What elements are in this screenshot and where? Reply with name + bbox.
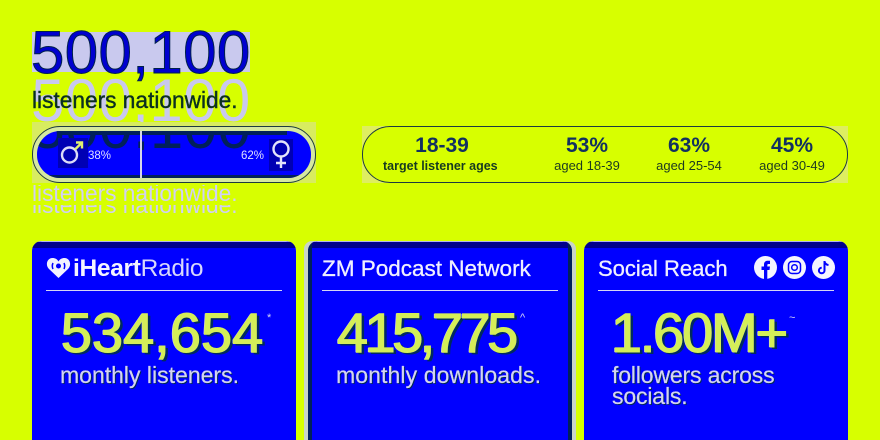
stat: 18-39: 18-39 xyxy=(415,134,469,157)
ghost text: lavender headline echoes xyxy=(31,67,251,213)
figure: 1.60M+: 1.60M+ xyxy=(611,301,786,364)
ghost text: lavender headline echoes: 500,100 xyxy=(31,67,251,134)
footnote mark: ~ xyxy=(789,312,795,324)
panel: ZM Podcast Network xyxy=(308,241,572,440)
panel: target ages xyxy=(362,126,848,183)
label: 38%: 38% xyxy=(88,150,111,162)
stat: 53%: aged 18-39 xyxy=(554,158,620,173)
stat: 63%: 63% xyxy=(668,134,710,157)
icon: male symbol xyxy=(58,138,88,168)
panel: gender split xyxy=(32,122,316,183)
logo: iHeartRadio: iHeartRadio xyxy=(73,255,203,282)
ghost text: lavender headline echoes: listeners nationwide. xyxy=(32,180,238,206)
stat: 45%: aged 30-49 xyxy=(759,158,825,173)
stat: 18-39: target listener ages xyxy=(383,159,498,173)
label: monthly downloads: monthly downloads. xyxy=(336,362,541,388)
heading: Social Reach: Social Reach xyxy=(598,256,728,281)
icon: Instagram xyxy=(783,256,806,279)
icon: TikTok xyxy=(812,256,835,279)
footnote mark: ^ xyxy=(520,312,525,324)
heading: ZM Podcast Network: ZM Podcast Network xyxy=(322,256,531,281)
figure: 415,775: 415,775 xyxy=(337,301,515,364)
footnote mark: * xyxy=(267,312,271,324)
label: monthly listeners: monthly listeners. xyxy=(60,362,239,388)
ghost text: lavender headline echoes: listeners nationwide. xyxy=(32,192,238,218)
figure: 534,654: 534,654 xyxy=(61,301,263,364)
stat: 63%: aged 25-54 xyxy=(656,158,722,173)
headline: 500,100: 500,100 xyxy=(31,19,251,86)
label: followers across socials: followers across socials. xyxy=(612,362,774,409)
stat: 53% xyxy=(554,134,620,173)
stat: 63% xyxy=(656,134,722,173)
label: 62%: 62% xyxy=(241,150,264,162)
stat: 45% xyxy=(759,134,825,173)
subheading: listeners nationwide: listeners nationwide. xyxy=(32,87,238,113)
icon: female symbol xyxy=(269,139,293,171)
panel: Social Reach xyxy=(584,241,848,440)
panel: iHeartRadio xyxy=(32,241,296,440)
stat: 18-39 xyxy=(383,134,498,173)
stat: 53%: 53% xyxy=(566,134,608,157)
stat: 45%: 45% xyxy=(771,134,813,157)
icon: Facebook xyxy=(754,256,777,279)
